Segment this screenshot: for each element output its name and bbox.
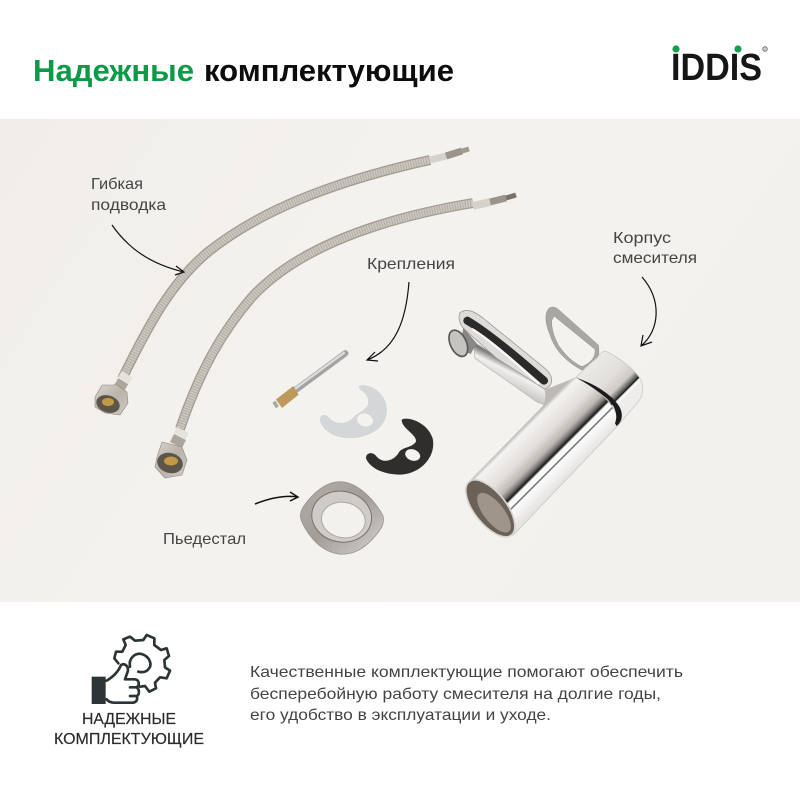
hose 2 — [155, 195, 516, 478]
logo: IDDIS: IDDIS — [671, 47, 762, 89]
label: pedestal — [163, 492, 298, 548]
label: faucet body — [613, 230, 697, 346]
label: flexible hose: подводка — [91, 197, 166, 214]
arrow: to faucet — [641, 277, 656, 346]
photo panel: faucet components — [0, 119, 800, 602]
cuff — [92, 677, 106, 704]
spout neck — [473, 342, 546, 405]
description text: его удобство в эксплуатации и уходе. — [250, 707, 551, 724]
label: faucet body: Корпус — [613, 230, 671, 247]
hose 1 — [94, 149, 469, 416]
arrow: to fasteners — [367, 282, 409, 361]
arm dark stripe — [467, 321, 544, 381]
spout mouth — [457, 472, 524, 545]
arrow: to pedestal — [255, 492, 298, 504]
handle loop — [546, 307, 599, 370]
arrow: to hose — [112, 225, 184, 275]
arm highlight — [473, 329, 538, 383]
icon caption: НАДЕЖНЫЕ — [82, 711, 176, 728]
icon caption: КОМПЛЕКТУЮЩИЕ — [54, 731, 204, 748]
aerator knob — [445, 327, 477, 359]
fitting nut 2 — [155, 442, 187, 478]
icon: thumbs up with gear — [92, 635, 170, 704]
fittings: stud, washers, pedestal — [274, 352, 433, 554]
icon caption — [54, 711, 204, 748]
gear inner arc — [130, 654, 150, 672]
description text: Качественные комплектующие помогают обеспечить — [250, 664, 683, 681]
label: flexible hose — [91, 176, 184, 275]
description text — [250, 664, 683, 724]
head — [576, 351, 643, 425]
label: fasteners — [367, 256, 455, 361]
faucet body — [445, 307, 643, 545]
main body — [469, 377, 620, 535]
spout arm — [459, 311, 552, 389]
thumb hand — [107, 664, 139, 703]
title: Надежные — [33, 53, 194, 88]
label: pedestal: Пьедестал — [163, 531, 246, 548]
dark seam — [577, 378, 622, 426]
icon: pedestal ring — [300, 482, 384, 554]
title — [33, 53, 454, 88]
label: flexible hose: Гибкая — [91, 176, 143, 193]
label: faucet body: смесителя — [613, 250, 697, 267]
description text: бесперебойную работу смесителя на долгие годы, — [250, 686, 661, 703]
gear — [114, 635, 170, 692]
icon: black washer — [366, 419, 433, 475]
icon: silver washer — [319, 385, 387, 439]
icon: threaded stud — [274, 352, 345, 408]
label: fasteners: Крепления — [367, 256, 455, 273]
title: комплектующие — [204, 53, 454, 88]
fitting nut 1 — [94, 385, 128, 416]
